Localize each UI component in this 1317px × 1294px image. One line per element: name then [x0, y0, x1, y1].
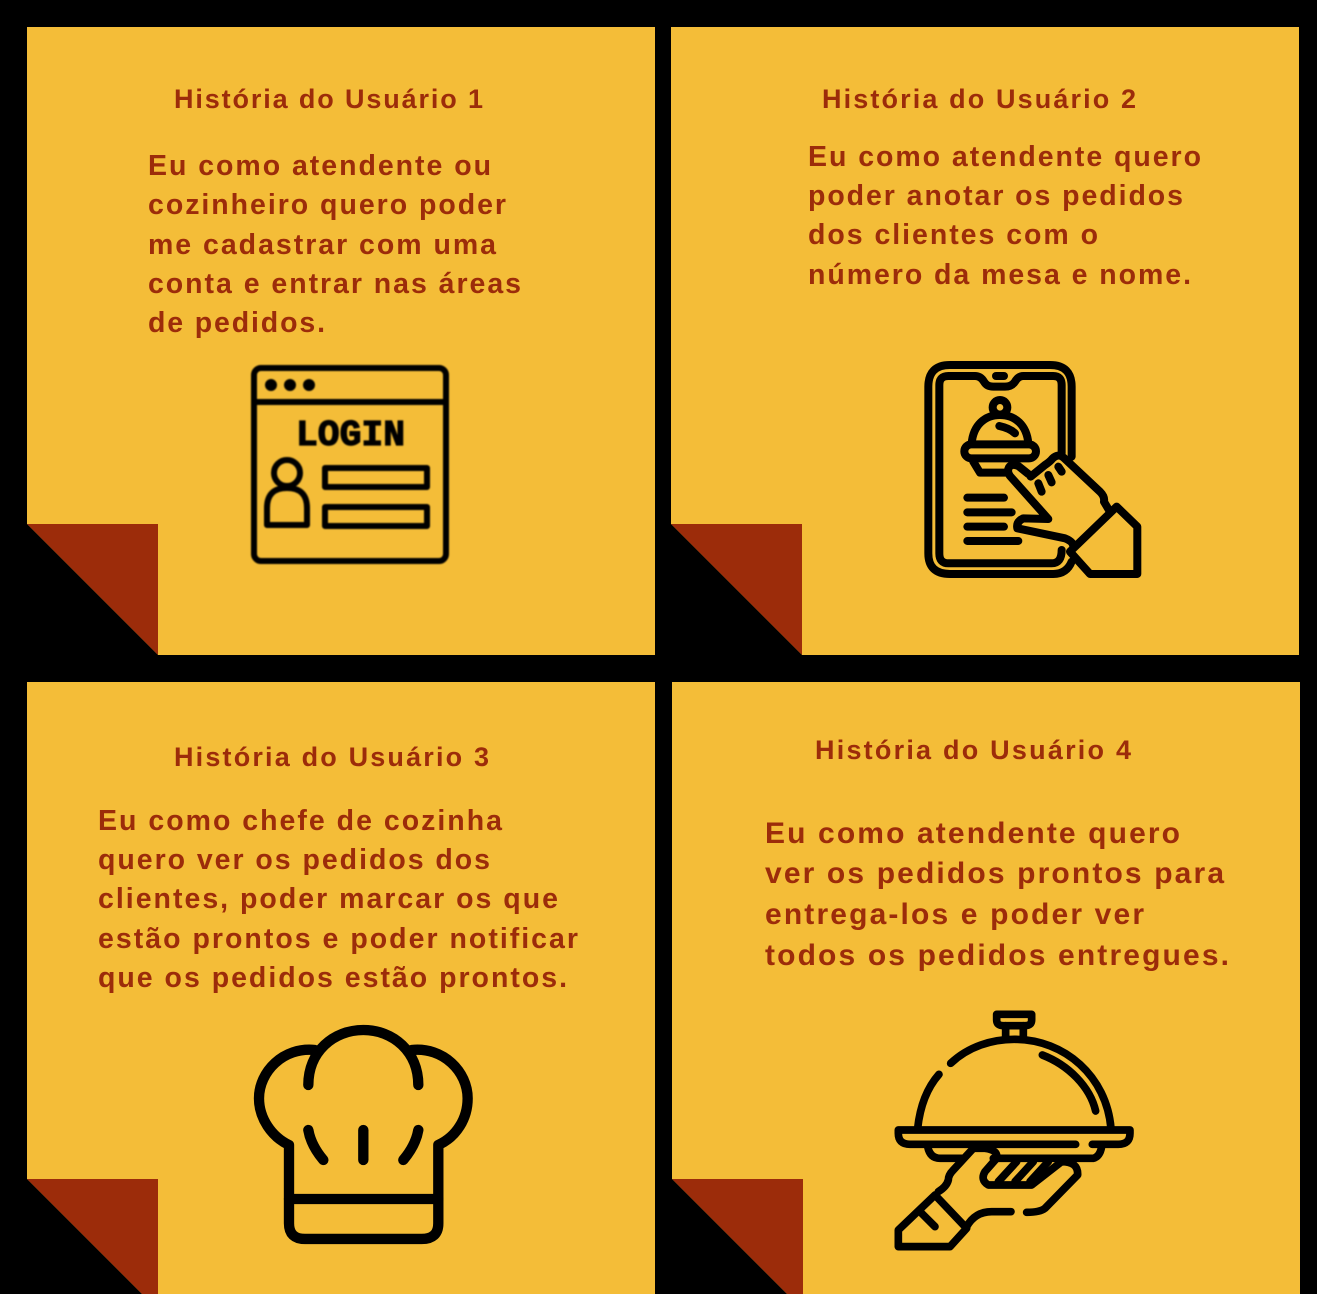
story text 2: poder anotar os pedidos [808, 180, 1183, 212]
panel: user story 1 [27, 27, 655, 655]
folded corner 3 [27, 1179, 158, 1294]
story text 3 [98, 805, 578, 994]
folded corner 4 [672, 1179, 803, 1294]
story text 2: número da mesa e nome. [808, 259, 1191, 291]
icon: chef hat [259, 1030, 468, 1239]
story text 4: ver os pedidos prontos para [765, 857, 1224, 890]
story text 1: cozinheiro quero poder [148, 189, 506, 221]
heading 3: História do Usuário 3 [174, 742, 489, 772]
story text 3: Eu como chefe de cozinha [98, 805, 503, 837]
story text 4: entrega-los e poder ver [765, 898, 1144, 931]
icon: login window: LOGIN [296, 415, 405, 456]
story text 4 [765, 817, 1229, 972]
icon: tablet with cloche and pointing hand [928, 365, 1137, 574]
panel: user story 3 [27, 682, 655, 1294]
panel: user story 4 [672, 682, 1300, 1294]
story text 1: conta e entrar nas áreas [148, 268, 521, 300]
panel: user story 2 [671, 27, 1299, 655]
story text 1 [148, 150, 521, 339]
story text 2: Eu como atendente quero [808, 141, 1201, 173]
story text 3: que os pedidos estão prontos. [98, 962, 567, 994]
story text 4: Eu como atendente quero [765, 817, 1180, 850]
heading 1: História do Usuário 1 [174, 84, 483, 114]
story text 2 [808, 141, 1201, 291]
heading 4: História do Usuário 4 [815, 735, 1131, 765]
story text 3: quero ver os pedidos dos [98, 844, 490, 876]
story text 1: de pedidos. [148, 307, 325, 339]
heading 2: História do Usuário 2 [822, 84, 1136, 114]
icon: login window [254, 368, 446, 561]
story text 1: me cadastrar com uma [148, 229, 497, 261]
story text 4: todos os pedidos entregues. [765, 939, 1229, 972]
folded corner 1 [27, 524, 158, 655]
folded corner 2 [671, 524, 802, 655]
story text 1: Eu como atendente ou [148, 150, 491, 182]
icon: hand holding cloche [898, 1014, 1130, 1247]
story text 3: clientes, poder marcar os que [98, 883, 558, 915]
story text 2: dos clientes com o [808, 219, 1098, 251]
story text 3: estão prontos e poder notificar [98, 923, 578, 955]
